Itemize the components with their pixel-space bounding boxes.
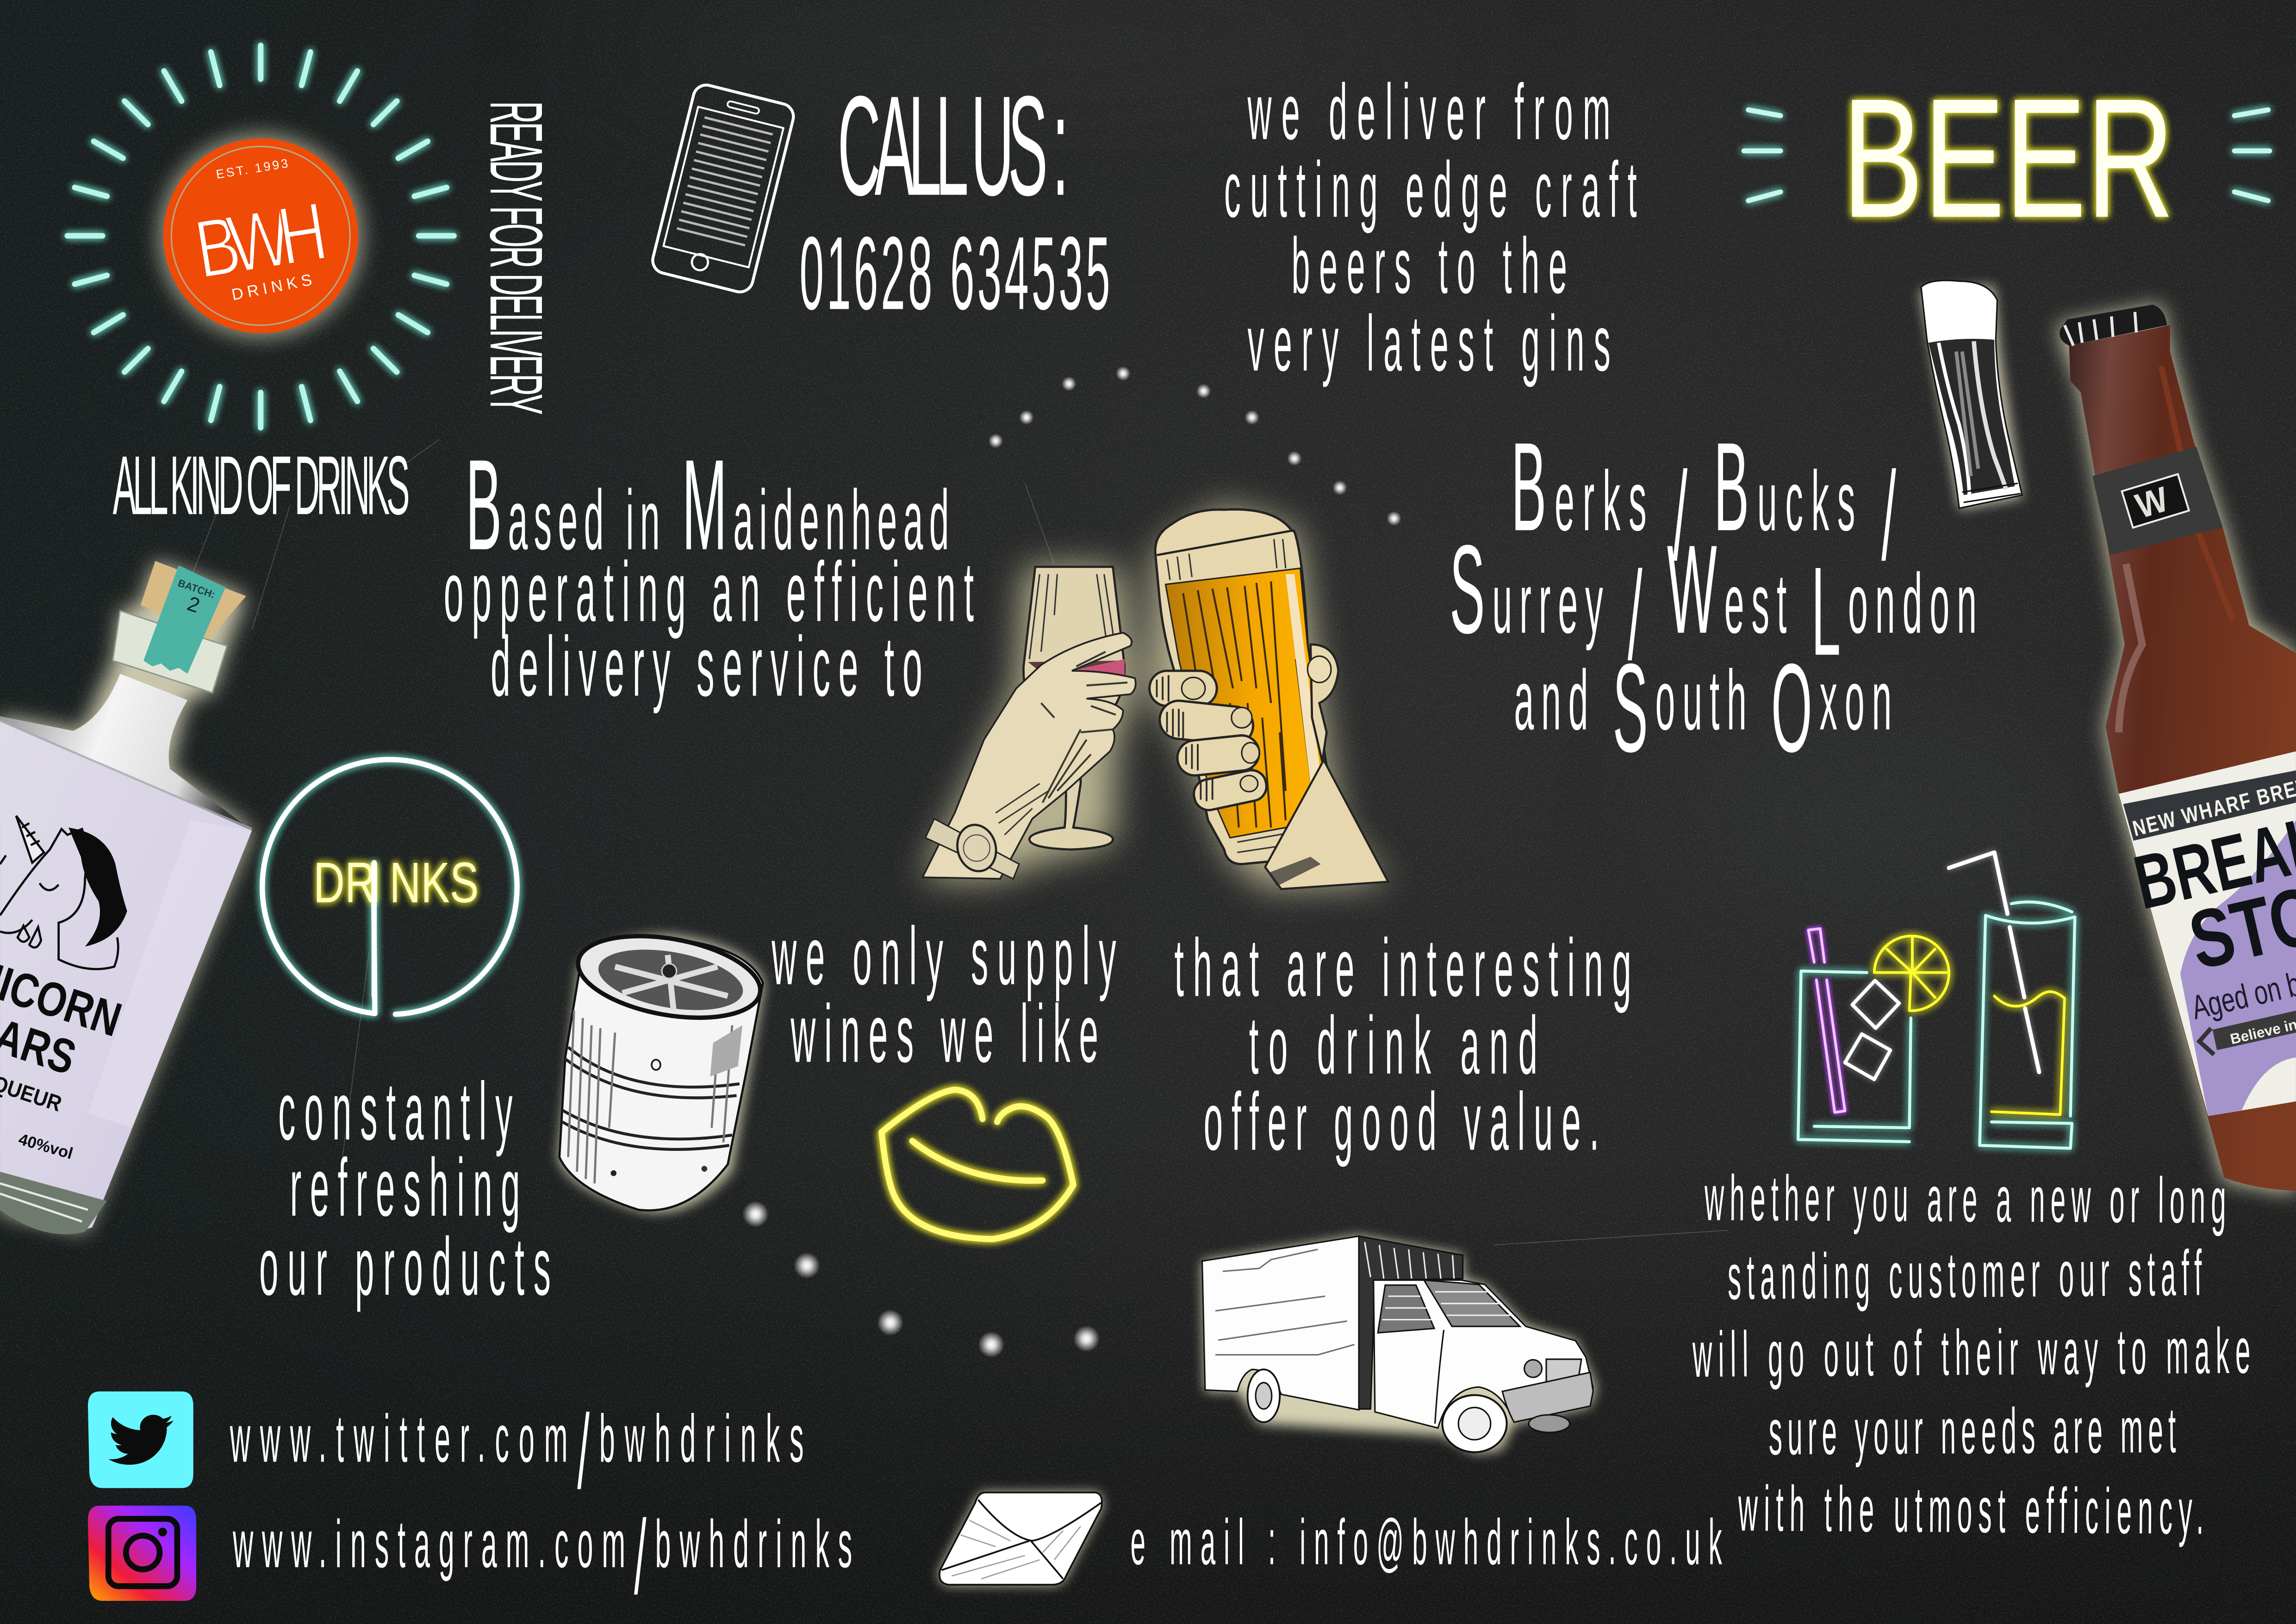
logo badge: BWH (189, 185, 333, 295)
bottle glow (2057, 305, 2296, 1193)
text: customer service: whether you are a new or long (1704, 1162, 2226, 1237)
icon: smartphone (650, 82, 796, 295)
bottle glow (0, 561, 252, 1232)
text: based in maidenhead: opperating an efficient (444, 544, 974, 639)
text: delivery area: L (1811, 541, 1841, 682)
illustration: clinking wine and beer glasses (922, 506, 1388, 889)
icon: envelope sketch (940, 1493, 1102, 1585)
text: delivery area: ucks (1757, 454, 1855, 548)
text: delivery area (1450, 417, 1977, 779)
truck cab (1374, 1280, 1593, 1428)
logo: BWH Drinks sunburst (68, 45, 454, 428)
wine glass (1023, 567, 1125, 849)
text: delivery range statement: very latest gins (1248, 299, 1611, 387)
bottle collar (113, 611, 227, 693)
neon DRINKS sign (262, 760, 517, 1014)
text: customer service (1692, 1162, 2251, 1548)
text: constantly refreshing: our products (259, 1220, 551, 1312)
text: customer service: with the utmost efficiency. (1738, 1472, 2204, 1548)
neck band with logo (2092, 447, 2223, 555)
truck box (1202, 1236, 1359, 1410)
bottle: New Wharf Breakfast Stout (2057, 305, 2296, 1193)
text: delivery area: ondon (1848, 556, 1977, 651)
bottle label (2119, 751, 2296, 1116)
text: delivery area: W (1667, 519, 1717, 660)
text: instagram url: / (634, 1499, 647, 1617)
beer glass (1155, 509, 1341, 864)
text: customer service: standing customer our staff (1727, 1237, 2202, 1313)
gin bottle: Unicorn Tears liqueur (0, 561, 252, 1234)
text: based in maidenhead (444, 433, 974, 714)
text: interesting to drink: that are interesting (1174, 922, 1631, 1013)
text: based in maidenhead: Based in Maidenhead (466, 433, 949, 577)
text: twitter url: / (577, 1393, 590, 1511)
text: twitter url: www.twitter.com (230, 1401, 568, 1476)
text: interesting to drink: offer good value. (1204, 1075, 1599, 1167)
text: delivery area: S (1613, 638, 1648, 779)
text: delivery range statement: we deliver from (1247, 67, 1611, 156)
text: call us: CALL US : (838, 66, 1069, 225)
icon: instagram badge (88, 1505, 196, 1601)
icon: neon rays (68, 45, 454, 428)
text: delivery area: O (1771, 638, 1812, 779)
text: delivery range statement: beers to the (1292, 221, 1567, 310)
batch tag: BATCH: (176, 577, 217, 600)
text: delivery area: est (1724, 556, 1786, 651)
text: wines we like: wines we like (790, 987, 1098, 1080)
icon: neon lips (882, 1090, 1073, 1239)
heading: neon BEER sign: BEER (1842, 63, 2174, 253)
lemonade level (1991, 992, 2065, 1115)
bottle lettering: 40%vol (17, 1130, 75, 1163)
text: delivery range statement (1224, 67, 1637, 387)
purple straw (1808, 929, 1845, 1112)
batch tag: 2 (185, 592, 203, 618)
text: delivery area: xon (1820, 653, 1892, 748)
neon word: DRINKS (313, 851, 479, 915)
text: customer service: will go out of their way to make (1692, 1314, 2251, 1391)
text: email address: e mail : info@bwhdrinks.co.uk (1131, 1505, 1722, 1578)
bottle lettering (0, 940, 128, 1163)
text: wines we like: we only supply (772, 910, 1116, 1002)
text: instagram url: bwhdrinks (655, 1506, 852, 1582)
text: delivery area: / (1881, 446, 1896, 587)
text: delivery area: B erks (1511, 417, 1647, 557)
decorative stars (742, 366, 1401, 1358)
batch tag (143, 565, 225, 674)
woman's hand with watch (922, 633, 1136, 879)
icon: neon circle (262, 760, 517, 1014)
right highball (1980, 902, 2075, 1148)
text: based in maidenhead: delivery service to (491, 619, 922, 714)
bottle cap (2060, 305, 2167, 346)
text: twitter url: bwhdrinks (599, 1401, 804, 1476)
logo badge: DRINKS (230, 270, 317, 304)
white straw (1949, 852, 2039, 1072)
text: delivery area: / (1673, 446, 1687, 587)
logo badge (163, 138, 358, 333)
cork (141, 561, 246, 638)
truck wheels (1442, 1395, 1507, 1452)
logo glow (158, 133, 363, 338)
text: ready for delivery: READY FOR DELIVERY (474, 101, 558, 415)
text: constantly refreshing: refreshing (290, 1142, 520, 1233)
text: wines we like (772, 910, 1116, 1080)
text: delivery range statement: cutting edge craft (1224, 145, 1637, 234)
text: interesting to drink: to drink and (1249, 999, 1537, 1091)
text: constantly refreshing: constantly (278, 1065, 513, 1157)
text: constantly refreshing (259, 1065, 551, 1312)
bottle body (0, 721, 252, 1232)
logo badge: EST. 1993 (215, 156, 291, 181)
text: delivery area: / (1628, 546, 1643, 686)
icon: keg sketch (558, 924, 767, 1212)
text: phone number: 01628 634535 (800, 215, 1110, 331)
text: delivery area: S urrey (1450, 519, 1603, 660)
text: delivery area: and (1514, 653, 1588, 748)
lemon slice (1874, 936, 1949, 1011)
bottle neck (0, 674, 252, 879)
illustration glow (922, 506, 1388, 887)
icon: neon dashes (1744, 110, 2270, 200)
text: customer service: sure your needs are met (1768, 1394, 2176, 1468)
text: delivery area: B (1714, 417, 1749, 557)
text: all kind of drinks: ALL KIND OF DRINKS (113, 439, 410, 532)
text: interesting to drink (1174, 922, 1631, 1167)
text: instagram url: www.instagram.com (233, 1506, 625, 1582)
bottle glass (2069, 325, 2296, 1191)
icon: neon cocktail glasses (1798, 852, 2075, 1148)
icon: pint glass sketch (1920, 281, 2022, 510)
unicorn illustration (0, 816, 126, 969)
icon: delivery truck sketch (1202, 1236, 1596, 1453)
left tumbler (1798, 971, 1911, 1142)
text: delivery area: outh (1655, 653, 1764, 748)
icon: twitter badge (88, 1392, 193, 1488)
man's hand and fist (1150, 644, 1388, 889)
ice cubes (1845, 981, 1899, 1080)
neck band with logo: W (2131, 479, 2173, 526)
neon stem over word (373, 862, 375, 996)
